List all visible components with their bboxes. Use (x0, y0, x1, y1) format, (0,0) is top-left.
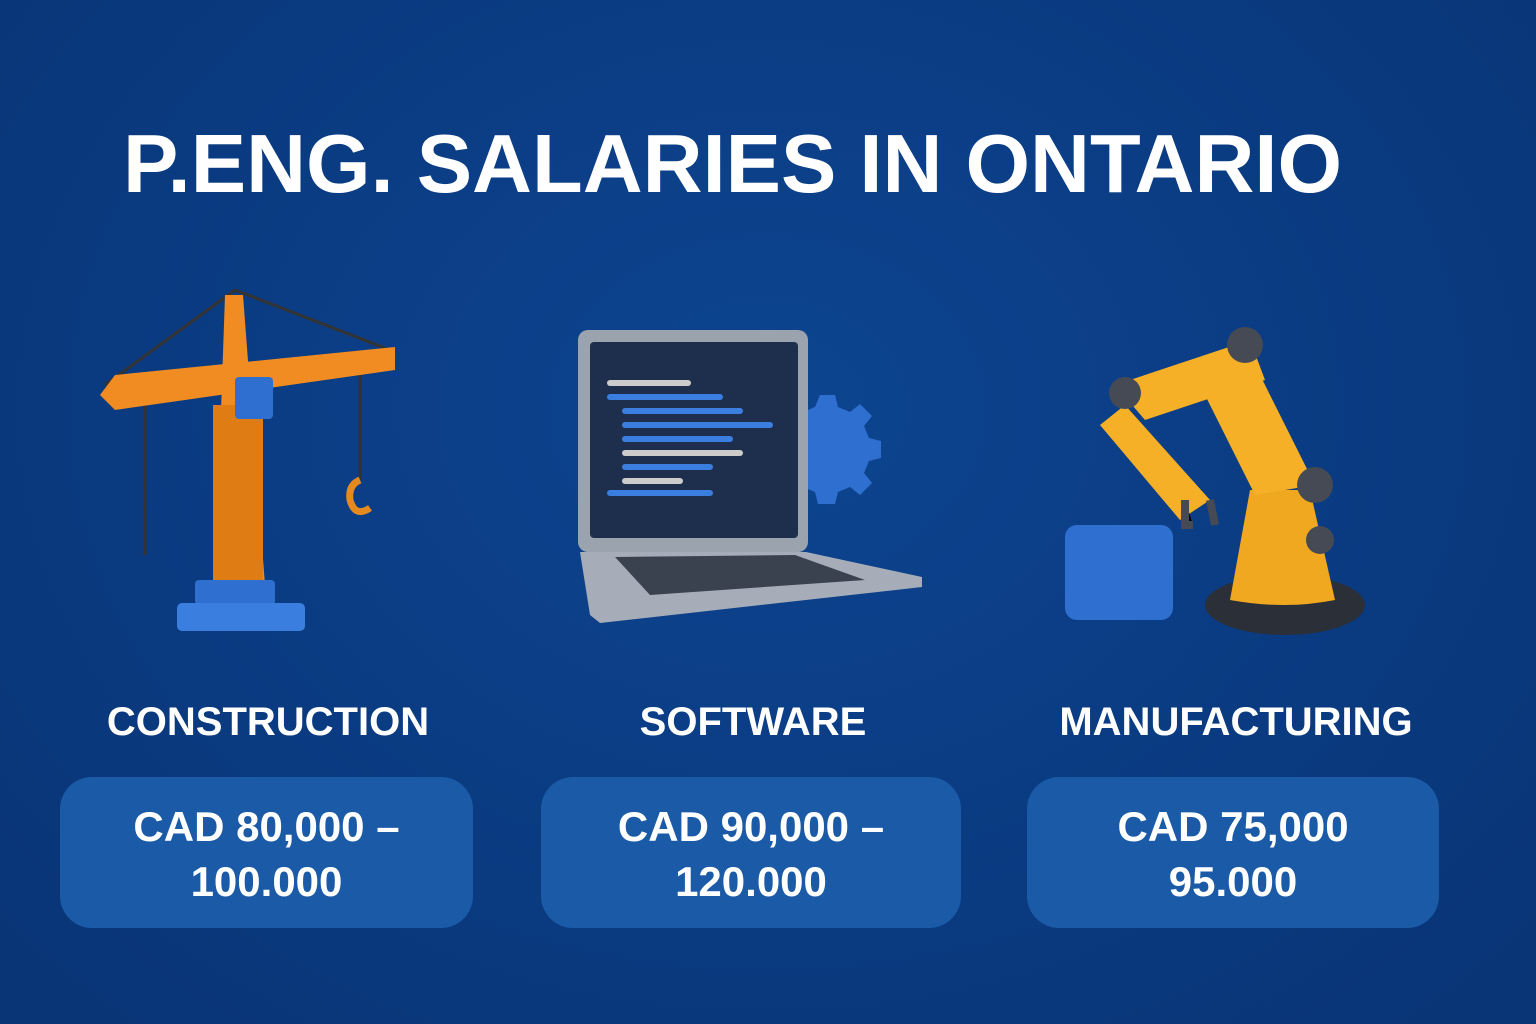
icon: robot arm (1065, 327, 1365, 635)
box: manufacturing salary: 95.000 (1169, 858, 1297, 905)
box: manufacturing salary (1027, 777, 1439, 928)
label: software: SOFTWARE (640, 700, 866, 744)
box: software salary: CAD 90,000 – (618, 803, 884, 850)
icon: crane (100, 288, 395, 631)
icon: laptop (578, 330, 922, 623)
box: software salary: 120.000 (675, 858, 827, 905)
label: manufacturing: MANUFACTURING (1059, 700, 1413, 744)
box: construction salary (60, 777, 473, 928)
box: manufacturing salary: CAD 75,000 (1117, 803, 1349, 850)
box: software salary (541, 777, 961, 928)
box: construction salary: CAD 80,000 – (133, 803, 400, 850)
label: construction: CONSTRUCTION (107, 700, 429, 744)
box: construction salary: 100.000 (191, 858, 342, 905)
title: P.ENG. SALARIES IN ONTARIO (123, 117, 1342, 210)
